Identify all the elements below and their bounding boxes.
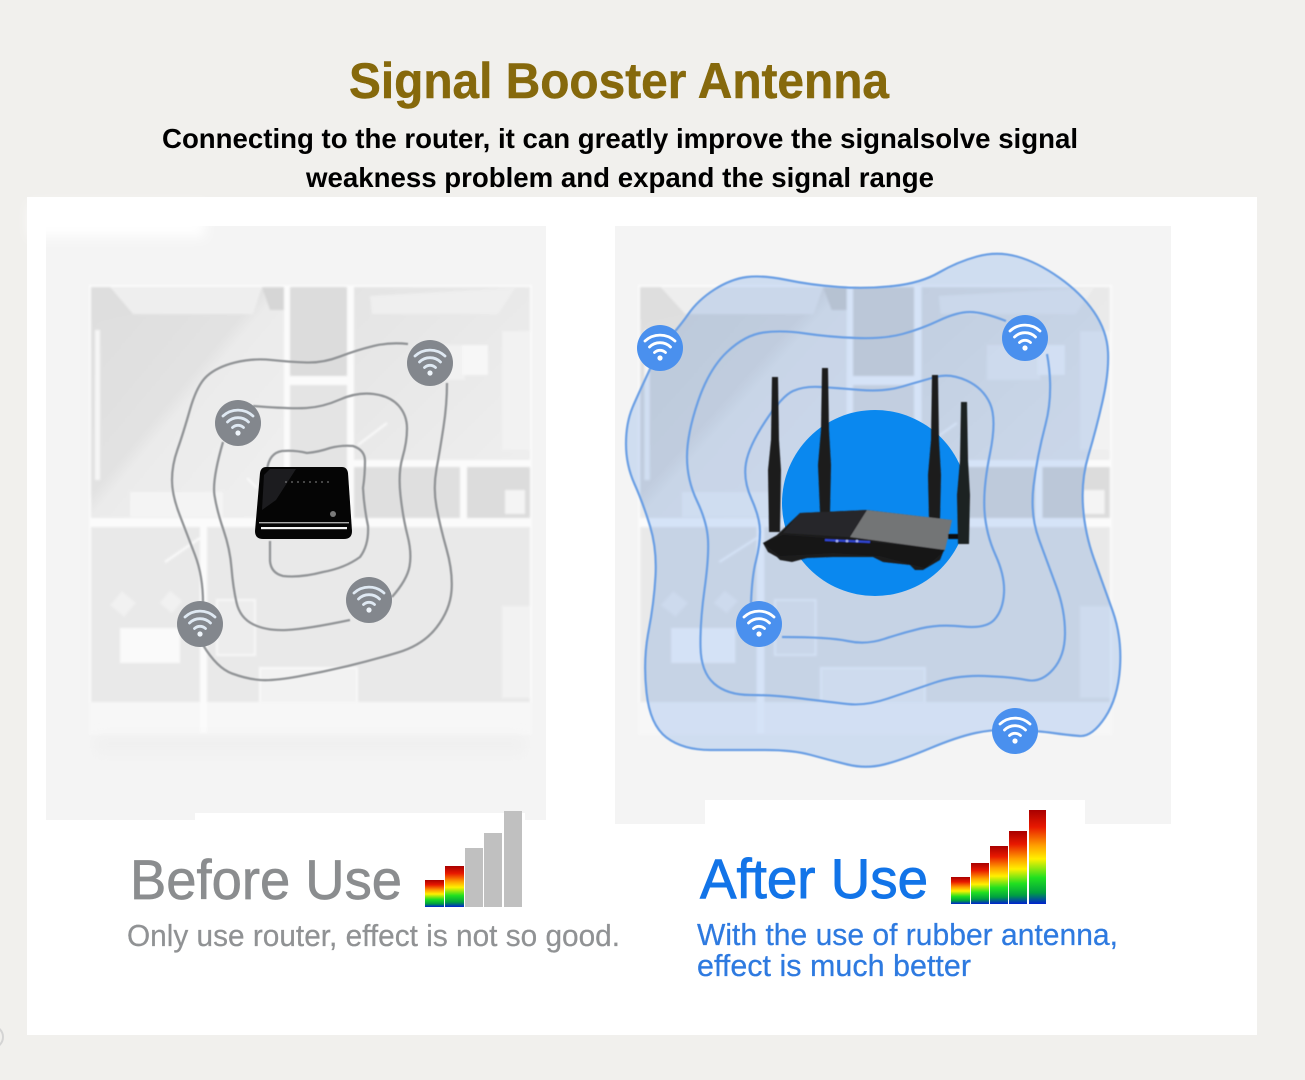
small edge mark (0, 1026, 3, 1048)
text: before caption: Only use router, effect is not so good. (127, 918, 620, 953)
blue signal circle (782, 410, 968, 596)
subtitle (162, 123, 1078, 193)
subtitle: weakness problem and expand the signal range (305, 162, 934, 193)
icon: wifi gray upper left (215, 400, 261, 446)
panel: after use floor plan (615, 226, 1171, 830)
icon: antenna router (763, 368, 970, 570)
icon: wifi blue far left (637, 325, 683, 371)
signal bars: before (425, 811, 522, 907)
signal bars: after (951, 810, 1046, 904)
white content card (27, 197, 1257, 1035)
signal contour lines: after (626, 254, 1120, 767)
text: after caption: effect is much better (697, 948, 971, 983)
signal contour lines: before (172, 343, 452, 680)
text: after caption: With the use of rubber antenna, (697, 917, 1118, 952)
icon: wifi gray lower left (177, 601, 223, 647)
title: Signal Booster Antenna (349, 53, 890, 109)
icon: wifi gray top right (407, 340, 453, 386)
icon: small black router (255, 467, 352, 539)
panel: before use floor plan (30, 205, 546, 825)
icon: wifi blue lower left (736, 601, 782, 647)
icon: wifi gray lower right (346, 577, 392, 623)
text: after caption (697, 917, 1118, 983)
icon: wifi blue top right (1002, 315, 1048, 361)
icon: wifi blue bottom right (992, 708, 1038, 754)
signal coverage area (626, 254, 1120, 767)
subtitle: Connecting to the router, it can greatly improve the signalsolve signal (162, 123, 1078, 154)
heading: after use: After Use (700, 847, 928, 910)
heading: before use: Before Use (130, 848, 402, 911)
